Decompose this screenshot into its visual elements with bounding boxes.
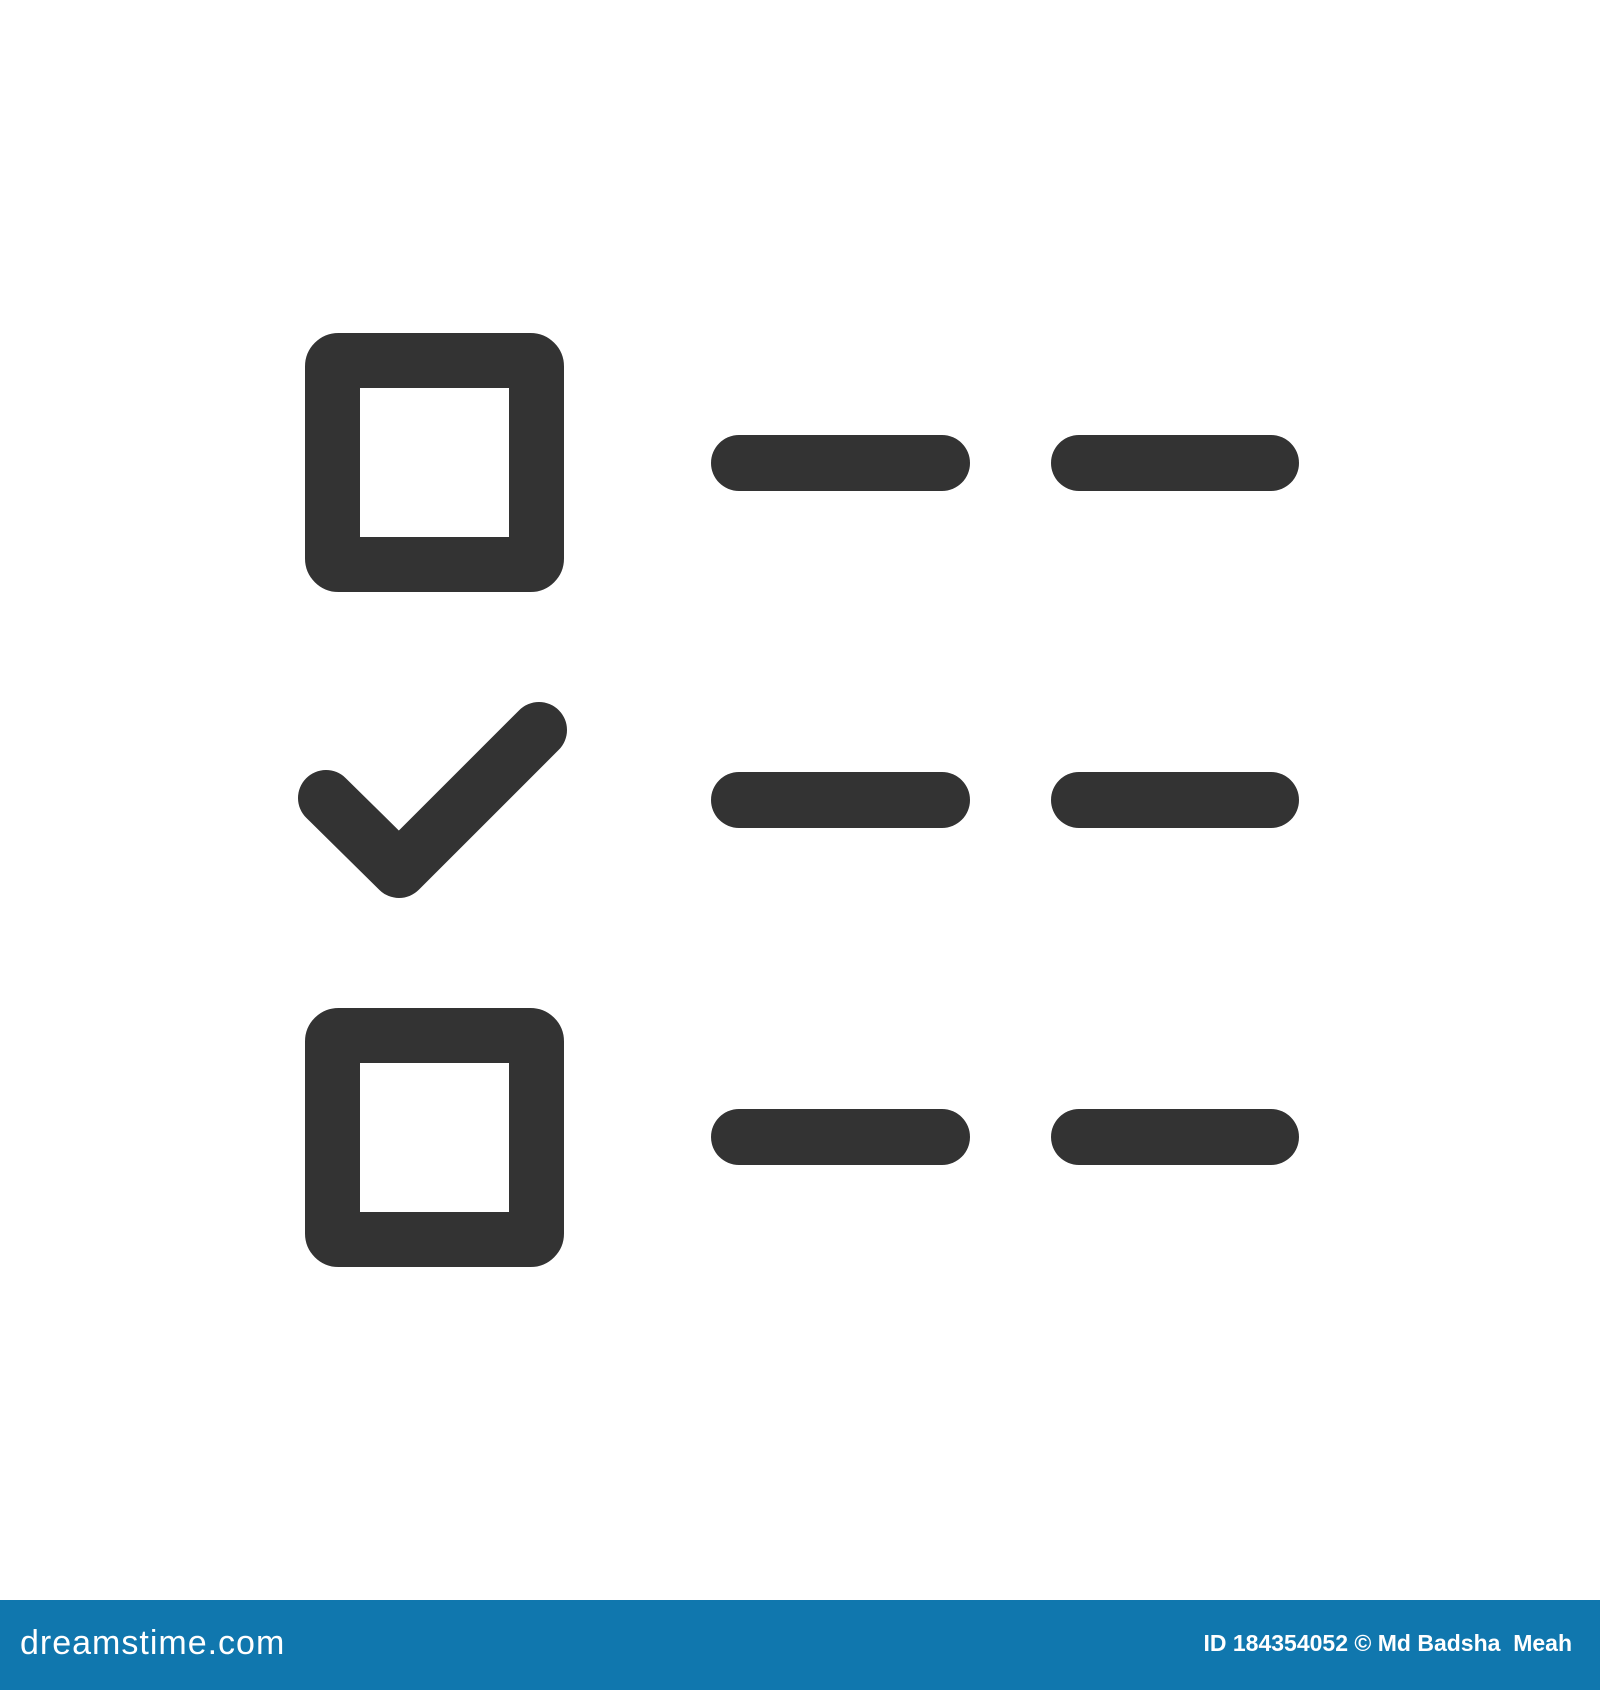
dashes row 2 [739,772,1271,828]
logo text: dreamstime.com [20,1624,285,1662]
dashes row 3 [739,1109,1271,1165]
dashes row 1 [739,435,1271,491]
icon: empty checkbox top [332,360,536,564]
image id credit: ID 184354052 © Md Badsha Meah [1204,1630,1572,1656]
footer bar [0,1600,1600,1690]
icon: checkmark [326,730,539,870]
icon: empty checkbox bottom [332,1036,536,1240]
